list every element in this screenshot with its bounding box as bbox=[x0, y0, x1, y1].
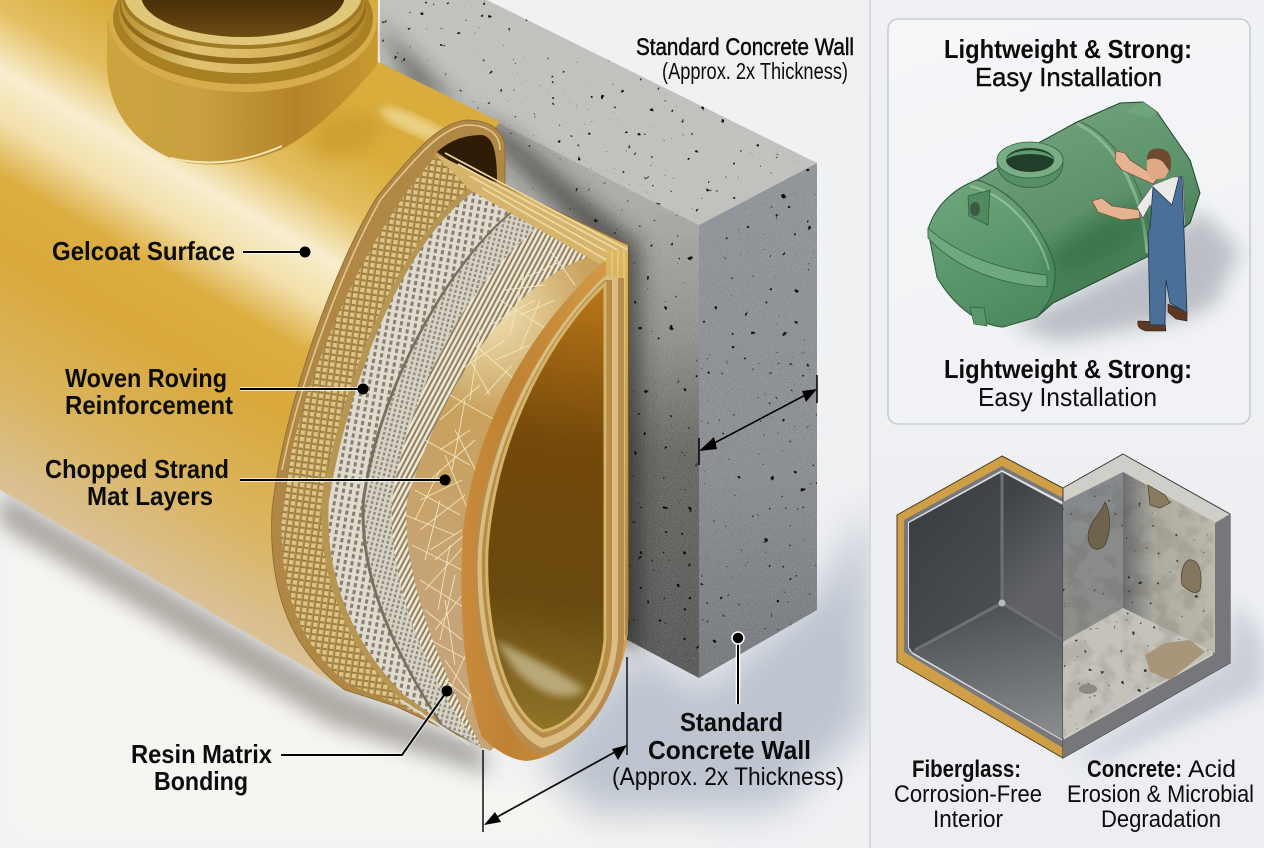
tank shadow bbox=[1010, 210, 1240, 342]
panel: concrete wall bbox=[375, 0, 820, 685]
panel: fiberglass pipe cutaway bbox=[0, 0, 628, 761]
pipe body bbox=[0, 0, 500, 690]
fiberglass right wall bbox=[1002, 472, 1063, 640]
chopped strand mat bbox=[405, 250, 628, 748]
icon: green tank bbox=[928, 102, 1200, 327]
label: Resin Matrix Bonding: Resin Matrix bbox=[131, 739, 272, 769]
fiberglass left wall bbox=[909, 472, 1002, 652]
panel: corrosion comparison bbox=[897, 454, 1264, 762]
tank end rib bbox=[928, 228, 1047, 287]
fiberglass half bbox=[897, 456, 1063, 758]
label: Chopped Strand Mat Layers bbox=[45, 454, 450, 511]
arrow: wall thickness dimension bbox=[699, 375, 817, 465]
pipe back opening bbox=[437, 135, 497, 182]
interior glare bbox=[495, 640, 585, 696]
label: Standard Concrete Wall top bbox=[636, 34, 854, 84]
concrete outer faces bbox=[1063, 514, 1230, 758]
floor shadow beneath pipe and wall bbox=[0, 490, 870, 815]
label: Standard Concrete Wall bottom: Concrete Wall bbox=[648, 735, 811, 765]
label: Woven Roving Reinforcement bbox=[65, 363, 368, 420]
tattered laminate at base bbox=[400, 700, 470, 745]
comparison label: concrete: Concrete: bbox=[1087, 756, 1182, 783]
comparison label: fiberglass: Fiberglass: bbox=[912, 756, 1021, 783]
arrow: fiberglass thickness dimension bbox=[483, 657, 627, 832]
tank body shading bbox=[1038, 194, 1162, 286]
tank middle rib bbox=[1077, 124, 1147, 253]
comparison label: concrete: Degradation bbox=[1101, 806, 1221, 833]
worker boots bbox=[1138, 304, 1187, 331]
concrete wall side face bbox=[699, 163, 817, 678]
card heading: Easy Installation bbox=[975, 62, 1162, 92]
concrete wall top face bbox=[380, 0, 817, 225]
icon: worker pushing tank bbox=[1092, 148, 1187, 331]
label: Standard Concrete Wall bottom bbox=[612, 707, 844, 791]
comparison shadow bbox=[1070, 600, 1264, 762]
card footer text: Lightweight & Strong: bbox=[944, 354, 1192, 384]
concrete right wall bbox=[1123, 472, 1215, 653]
rim outer band bbox=[272, 120, 628, 750]
floor bbox=[0, 500, 700, 848]
label: Resin Matrix Bonding: Bonding bbox=[154, 766, 248, 796]
panel: lightweight card bbox=[888, 19, 1250, 424]
worker arms bbox=[1092, 198, 1140, 220]
label: Resin Matrix Bonding bbox=[131, 686, 452, 796]
label: Woven Roving Reinforcement: Reinforcement bbox=[65, 390, 233, 420]
label: Chopped Strand Mat Layers: Mat Layers bbox=[87, 481, 213, 511]
label: Woven Roving Reinforcement: Woven Roving bbox=[65, 363, 227, 393]
card footer text: Easy Installation bbox=[978, 382, 1157, 412]
label: Standard Concrete Wall bottom: (Approx. 2x Thickness) bbox=[612, 763, 844, 791]
threaded nozzle bbox=[107, 0, 377, 165]
concrete left wall bbox=[1063, 472, 1123, 642]
card heading: Lightweight & Strong: bbox=[944, 34, 1192, 64]
label: Standard Concrete Wall bottom: Standard bbox=[680, 707, 783, 737]
woven roving layer bbox=[282, 156, 628, 750]
label: Gelcoat Surface: Gelcoat Surface bbox=[52, 236, 235, 266]
hatched fiber layer bbox=[392, 226, 628, 748]
comparison label: concrete: Acid bbox=[1188, 756, 1236, 783]
leader: concrete wall bbox=[732, 632, 744, 704]
comparison label: fiberglass: Corrosion-Free bbox=[894, 781, 1042, 808]
label: Standard Concrete Wall top: (Approx. 2x Thickness) bbox=[662, 58, 848, 84]
tank end cap bbox=[928, 180, 1055, 327]
worker overalls bbox=[1148, 177, 1187, 325]
fine mesh layer bbox=[362, 212, 628, 748]
body shading near nozzle bbox=[302, 103, 388, 167]
resin matrix rim bbox=[461, 262, 628, 761]
comparison label: fiberglass: Interior bbox=[933, 806, 1003, 833]
card footer text bbox=[944, 354, 1192, 412]
worker head bbox=[1147, 149, 1171, 180]
concrete wall front face bbox=[380, 62, 699, 678]
label: Chopped Strand Mat Layers: Chopped Strand bbox=[45, 454, 229, 484]
worker shirt bbox=[1137, 177, 1185, 230]
comparison label: fiberglass bbox=[894, 756, 1042, 833]
separator band bbox=[321, 186, 628, 742]
card heading bbox=[944, 34, 1192, 92]
white fiberglass mesh layer bbox=[328, 190, 628, 745]
tank top port bbox=[997, 142, 1063, 188]
erosion patches bbox=[1079, 485, 1205, 694]
sidebar background bbox=[870, 0, 1264, 848]
sidebar divider bbox=[869, 0, 871, 848]
right laminate edge bbox=[606, 245, 628, 640]
comparison label: concrete bbox=[1067, 756, 1254, 833]
concrete half bbox=[1063, 454, 1230, 758]
concrete floor bbox=[1063, 608, 1213, 738]
top edge laminate strip bbox=[434, 153, 628, 272]
label: Standard Concrete Wall top: Standard Concrete Wall bbox=[636, 34, 854, 61]
fiberglass floor bbox=[912, 603, 1063, 740]
rim rings and interior of pipe bbox=[475, 276, 624, 755]
tank side fitting bbox=[968, 190, 990, 225]
